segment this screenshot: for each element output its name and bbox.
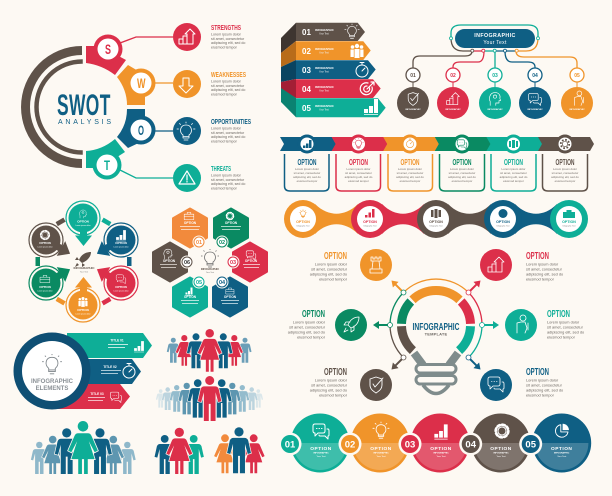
ribbon folds (281, 23, 296, 117)
hexagon 04: OPTION (224, 295, 237, 299)
item 02: 02 (302, 47, 311, 56)
option blue: eiusmod tempor (297, 179, 317, 183)
segment T: T (104, 157, 110, 173)
chain link orange: Infographic Text (297, 224, 310, 228)
hexagon 06: OPTION (163, 259, 176, 263)
item 02: INFOGRAPHIC (315, 47, 334, 51)
analysis subtitle: ANALYSIS (58, 119, 111, 126)
elements title: INFOGRAPHIC (31, 379, 74, 385)
chain link blue: OPTION (496, 220, 510, 224)
bar: title 02: TITLE 02 (103, 365, 117, 369)
option orange: Lorem ipsum dolor (398, 167, 422, 171)
chain link orange (284, 200, 358, 238)
badge 02: 02 (345, 440, 355, 450)
option brown: sit amet, consectetur (552, 171, 578, 175)
circle 03: Your Text (436, 455, 446, 458)
icon: center rocket (74, 252, 95, 274)
node 02 (437, 68, 469, 119)
text: middle left: adipiscing elit, sed do (288, 330, 325, 334)
bulb segment red (461, 302, 470, 324)
panel: chevron options (280, 134, 594, 191)
item 01: 01 (302, 28, 311, 37)
text: opportunities: adipiscing elit, sed do (211, 135, 245, 139)
icon: center bulb: INFOGRAPHIC (201, 267, 219, 271)
node: teal: Lorem ipsum dolor (76, 225, 91, 227)
text: threats (211, 164, 245, 190)
hexagon 01: OPTION (184, 221, 197, 225)
text: top right: OPTION (526, 251, 549, 262)
bulb base (414, 353, 458, 394)
circle 03: INFOGRAPHIC (433, 452, 449, 454)
text: threats: THREATS (211, 164, 231, 173)
option brown: Lorem ipsum dolor (553, 167, 577, 171)
text: opportunities (211, 117, 251, 143)
connector lines (413, 25, 577, 68)
node 05 (561, 68, 593, 119)
node: orange: Lorem ipsum dolor (76, 314, 91, 316)
thin outer arcs (390, 279, 482, 358)
option blue (280, 134, 336, 191)
circle 02: OPTION (370, 446, 392, 452)
text: bottom right (526, 367, 563, 398)
text: bottom left (310, 367, 348, 398)
text: opportunities: eiusmod tempor (211, 139, 238, 143)
text: top right (526, 251, 563, 282)
option orange: sit amet, consectetur (397, 171, 423, 175)
text: threats: Lorem ipsum dolor (211, 174, 242, 178)
text: top right: sit amet, consectetur (526, 266, 563, 272)
item 01 (296, 23, 365, 41)
node: green: OPTION (39, 285, 51, 289)
badge 03: 03 (405, 440, 415, 450)
option teal: eiusmod tempor (503, 179, 524, 183)
elements title: ELEMENTS (36, 386, 68, 392)
bulb title: INFOGRAPHIC (412, 322, 460, 333)
item 05: 05 (302, 104, 311, 113)
inner brown arc (35, 60, 82, 154)
node: blue: Lorem ipsum dolor (114, 246, 129, 248)
hexagon 06 (153, 242, 194, 282)
text: middle left: OPTION (302, 309, 325, 320)
people group 2 (156, 376, 263, 421)
node 03: INFOGRAPHIC (487, 108, 503, 111)
text: bottom left: adipiscing elit, sed do (310, 388, 347, 392)
item 05: Your Text (319, 108, 329, 112)
node 04: INFOGRAPHIC (527, 108, 543, 111)
badge 05: 05 (525, 440, 537, 450)
segment S (86, 34, 173, 75)
node 02: 02 (450, 73, 456, 79)
option blue: sit amet, consectetur (294, 171, 320, 175)
title pill: Your Text (483, 40, 507, 46)
hexagon 03: OPTION (245, 259, 258, 263)
option orange: OPTION (400, 158, 420, 167)
badge 02 (338, 432, 362, 456)
chain link teal: OPTION (562, 220, 576, 224)
node: green (29, 262, 74, 300)
option red: Lorem ipsum dolor (347, 167, 370, 171)
item 04: 04 (302, 85, 311, 94)
panel: hexagons (153, 208, 267, 316)
icon: strengths (173, 23, 201, 51)
circle 01: INFOGRAPHIC (313, 452, 329, 454)
item 03 (296, 60, 376, 79)
circle 04 (471, 414, 530, 472)
text: middle right: sit amet, consectetur (547, 324, 584, 330)
hexagon 05: OPTION (184, 295, 197, 299)
text: strengths: sit amet, consectetur (211, 37, 245, 41)
item 04 (296, 79, 381, 98)
title pill: INFOGRAPHIC (474, 33, 516, 39)
option green: adipiscing elit, sed do (448, 175, 476, 179)
icon: weaknesses (173, 70, 201, 98)
hexagon 02: 02 (219, 240, 225, 246)
option blue: Lorem ipsum dolor (295, 167, 319, 171)
text: bottom right: OPTION (526, 367, 549, 378)
item 03: 03 (302, 66, 311, 75)
node: red: Lorem ipsum dolor (114, 290, 129, 292)
arrow blue (464, 353, 483, 372)
circle 05 (532, 414, 591, 472)
connector blocks (36, 218, 132, 305)
text: middle right: Lorem ipsum dolor (547, 320, 580, 324)
people group 5 (214, 427, 265, 473)
hexagon 02: OPTION (225, 221, 238, 225)
panel: org chart (397, 25, 593, 119)
chain link red (351, 200, 424, 238)
node: brown: Lorem ipsum dolor (38, 246, 53, 248)
option green: sit amet, consectetur (449, 171, 475, 175)
option red: sit amet, consectetur (345, 171, 372, 175)
text: weaknesses (211, 70, 246, 96)
text: middle left: sit amet, consectetur (289, 324, 326, 330)
chain link orange: OPTION (296, 220, 310, 224)
item 04: Your Text (319, 90, 329, 92)
option red: adipiscing elit, sed do (345, 175, 373, 179)
elements title (31, 379, 74, 392)
option teal: Lorem ipsum dolor (502, 167, 525, 171)
item 04: INFOGRAPHIC (315, 85, 334, 89)
circle 03 (410, 414, 470, 472)
badge 01: 01 (285, 440, 296, 450)
panel: infographic elements (14, 332, 152, 410)
node: blue (93, 223, 138, 261)
node: red: OPTION (115, 285, 127, 289)
text: top right: Lorem ipsum dolor (526, 262, 559, 266)
node 05: 05 (574, 73, 580, 79)
segment W: W (137, 75, 146, 91)
arrow teal (480, 321, 499, 329)
circle 01: OPTION (310, 446, 332, 452)
chain link brown (417, 200, 491, 238)
option brown: adipiscing elit, sed do (551, 175, 579, 179)
text: weaknesses: sit amet, consectetur (211, 84, 245, 88)
node: orange (66, 277, 100, 322)
chain link teal (550, 200, 588, 238)
node: brown: OPTION (39, 241, 51, 245)
text: middle left: eiusmod tempor (297, 334, 326, 340)
chain link blue (484, 200, 557, 238)
circle 01: Your Text (316, 455, 326, 458)
item 05: INFOGRAPHIC (315, 104, 334, 108)
text: top left: adipiscing elit, sed do (310, 272, 347, 276)
bar: title 03: TITLE 03 (90, 392, 104, 396)
text: top left: eiusmod tempor (319, 276, 348, 282)
item 05 (296, 98, 386, 117)
SWOT title: SWOT (57, 89, 110, 122)
option green (435, 134, 491, 191)
icon: center bulb (201, 249, 219, 274)
icon: man with gears (505, 309, 537, 341)
chain link brown: Infographic Text (430, 224, 443, 228)
icon: threats (173, 164, 201, 192)
bulb segment orange (412, 291, 460, 300)
text: top right: adipiscing elit, sed do (526, 272, 563, 276)
panel: circular arrows (29, 201, 138, 322)
icon: center rocket: Your Text (80, 270, 89, 274)
option orange (383, 134, 439, 191)
circle 05: Your Text (557, 455, 567, 458)
text: weaknesses: Lorem ipsum dolor (211, 80, 242, 84)
segment S: S (105, 41, 111, 57)
panel: chain of circles (284, 200, 588, 238)
text: bottom right: Lorem ipsum dolor (526, 378, 559, 382)
text: bottom left: Lorem ipsum dolor (315, 378, 348, 382)
icon: bulb (42, 354, 62, 374)
text: bottom right: sit amet, consectetur (526, 382, 563, 388)
text: opportunities: sit amet, consectetur (211, 131, 245, 135)
bulb title: TEMPLATE (425, 332, 448, 336)
chain link red: Infographic Text (364, 224, 377, 228)
node: teal (66, 201, 100, 246)
segment O (117, 109, 173, 148)
text: threats: adipiscing elit, sed do (211, 182, 245, 186)
hexagon 05: 05 (196, 280, 202, 286)
circle 02: Your Text (376, 455, 386, 458)
text: weaknesses: WEAKNESSES (211, 70, 246, 79)
text: top left: sit amet, consectetur (311, 266, 348, 272)
bar: title 01: TITLE 01 (110, 338, 124, 342)
people group 3 (31, 421, 136, 474)
text: middle right: adipiscing elit, sed do (547, 330, 584, 334)
text: opportunities: OPPORTUNITIES (211, 117, 251, 126)
option teal: adipiscing elit, sed do (500, 175, 528, 179)
node 03: 03 (492, 73, 498, 79)
node: teal: OPTION (77, 220, 89, 224)
hexagon 01 (173, 208, 207, 248)
text: top left: Lorem ipsum dolor (315, 262, 348, 266)
item 01: INFOGRAPHIC (315, 28, 334, 32)
badge circle (14, 332, 90, 410)
hexagon 01: 01 (196, 240, 202, 246)
text: weaknesses: eiusmod tempor (211, 92, 238, 96)
icon: opportunities (173, 117, 201, 145)
icon: center rocket: INFOGRAPHIC (74, 266, 95, 270)
text: strengths: eiusmod tempor (211, 45, 238, 49)
text: bottom right: eiusmod tempor (526, 392, 555, 398)
node 01 (397, 68, 429, 119)
segment O: O (138, 122, 144, 138)
connector dots (450, 37, 540, 52)
text: strengths: STRENGTHS (211, 23, 241, 32)
badge 04 (459, 432, 482, 456)
people group 4 (155, 428, 204, 474)
people group 1 (167, 329, 252, 372)
circle 01 (290, 414, 350, 472)
hexagon 06: 06 (184, 260, 190, 266)
text: strengths: adipiscing elit, sed do (211, 41, 245, 45)
segment T (86, 139, 173, 180)
arrow brown (389, 353, 408, 372)
option brown (538, 134, 594, 191)
icon: growth (480, 249, 512, 281)
item 02 (296, 41, 371, 60)
bulb segment teal (459, 326, 470, 351)
option brown: OPTION (556, 158, 575, 167)
node 04: 04 (532, 73, 538, 79)
option blue: adipiscing elit, sed do (293, 175, 321, 179)
panel: numbered circles row (278, 414, 591, 472)
text: top right: eiusmod tempor (526, 276, 555, 282)
node 02: INFOGRAPHIC (445, 108, 461, 111)
node: red (93, 262, 138, 300)
item 03: INFOGRAPHIC (315, 66, 334, 70)
arrow red (464, 278, 483, 297)
circle 03: OPTION (430, 446, 452, 452)
option green: eiusmod tempor (452, 179, 472, 183)
circle 05: INFOGRAPHIC (554, 452, 570, 454)
circle 05: OPTION (551, 446, 572, 452)
badge 01 (278, 432, 302, 456)
bulb segment green (402, 302, 411, 324)
hexagon 04 (213, 276, 247, 316)
hexagon 03 (226, 242, 267, 282)
node: blue: OPTION (115, 241, 127, 245)
circle 04: Your Text (496, 455, 506, 458)
text: bottom left: eiusmod tempor (319, 392, 348, 398)
badge 05 (519, 432, 542, 456)
item 02: Your Text (319, 52, 329, 54)
circle 04: INFOGRAPHIC (493, 452, 509, 454)
node 04 (519, 68, 551, 119)
text: middle right: eiusmod tempor (547, 334, 576, 340)
text: strengths: Lorem ipsum dolor (211, 32, 242, 36)
chain link teal: Infographic Text (563, 224, 576, 228)
option orange: eiusmod tempor (400, 179, 420, 183)
panel: SWOT analysis (21, 23, 251, 192)
panel: stacked ribbon list (281, 23, 386, 117)
node: brown (29, 223, 74, 261)
text: middle left: Lorem ipsum dolor (293, 320, 326, 324)
text: bottom right: adipiscing elit, sed do (526, 388, 563, 392)
chain link blue: Infographic Text (497, 224, 510, 228)
icon: shield (360, 369, 392, 401)
badge 04: 04 (465, 440, 477, 450)
hexagon 03: 03 (230, 260, 236, 266)
segment W (117, 65, 173, 105)
option green: OPTION (452, 158, 472, 167)
chain link brown: OPTION (429, 220, 443, 224)
node 01: INFOGRAPHIC (405, 108, 421, 111)
text: middle left (288, 309, 326, 340)
icon: rook (360, 249, 392, 281)
item 03: Your Text (319, 70, 329, 74)
node 03 (479, 68, 511, 119)
node: orange: OPTION (77, 308, 89, 312)
node 05: INFOGRAPHIC (569, 108, 585, 111)
text: top left (310, 251, 348, 282)
text: threats: eiusmod tempor (211, 186, 238, 190)
option teal: sit amet, consectetur (500, 171, 527, 175)
outer brown arc (21, 46, 82, 168)
node 01: 01 (410, 73, 416, 79)
circle 04: OPTION (490, 446, 512, 452)
title pill (455, 29, 535, 48)
text: opportunities: Lorem ipsum dolor (211, 126, 242, 130)
badge 03 (398, 432, 422, 456)
arrow green (373, 321, 392, 329)
text: middle right: OPTION (547, 309, 570, 320)
option red (332, 134, 388, 191)
option teal: OPTION (504, 158, 523, 167)
option blue: OPTION (298, 158, 317, 167)
circle 02 (350, 414, 410, 472)
hexagon 02 (214, 208, 248, 248)
text: weaknesses: adipiscing elit, sed do (211, 88, 245, 92)
text: threats: sit amet, consectetur (211, 178, 245, 182)
text: strengths (211, 23, 245, 49)
text: top left: OPTION (324, 251, 347, 262)
icon: rocket (335, 309, 367, 341)
option teal (486, 134, 542, 191)
icon: center bulb: Your Text (206, 271, 215, 274)
option brown: eiusmod tempor (555, 179, 575, 183)
option red: eiusmod tempor (348, 179, 369, 183)
item 01: Your Text (319, 32, 329, 36)
chain link red: OPTION (363, 220, 377, 224)
circle 02: INFOGRAPHIC (373, 452, 389, 454)
text: middle right (547, 309, 584, 340)
hexagon 05 (173, 276, 207, 316)
text: bottom left: sit amet, consectetur (311, 382, 348, 388)
text: bottom left: OPTION (324, 367, 347, 378)
option orange: adipiscing elit, sed do (396, 175, 424, 179)
hexagon 04: 04 (219, 280, 226, 286)
node: green: Lorem ipsum dolor (38, 290, 53, 292)
icon: speech bubbles (480, 369, 512, 401)
bulb segment brown (402, 326, 413, 351)
option red: OPTION (349, 158, 368, 167)
arrow orange (389, 278, 408, 297)
panel: bulb diagram (288, 249, 584, 401)
bulb title (412, 322, 460, 336)
option green: Lorem ipsum dolor (450, 167, 474, 171)
